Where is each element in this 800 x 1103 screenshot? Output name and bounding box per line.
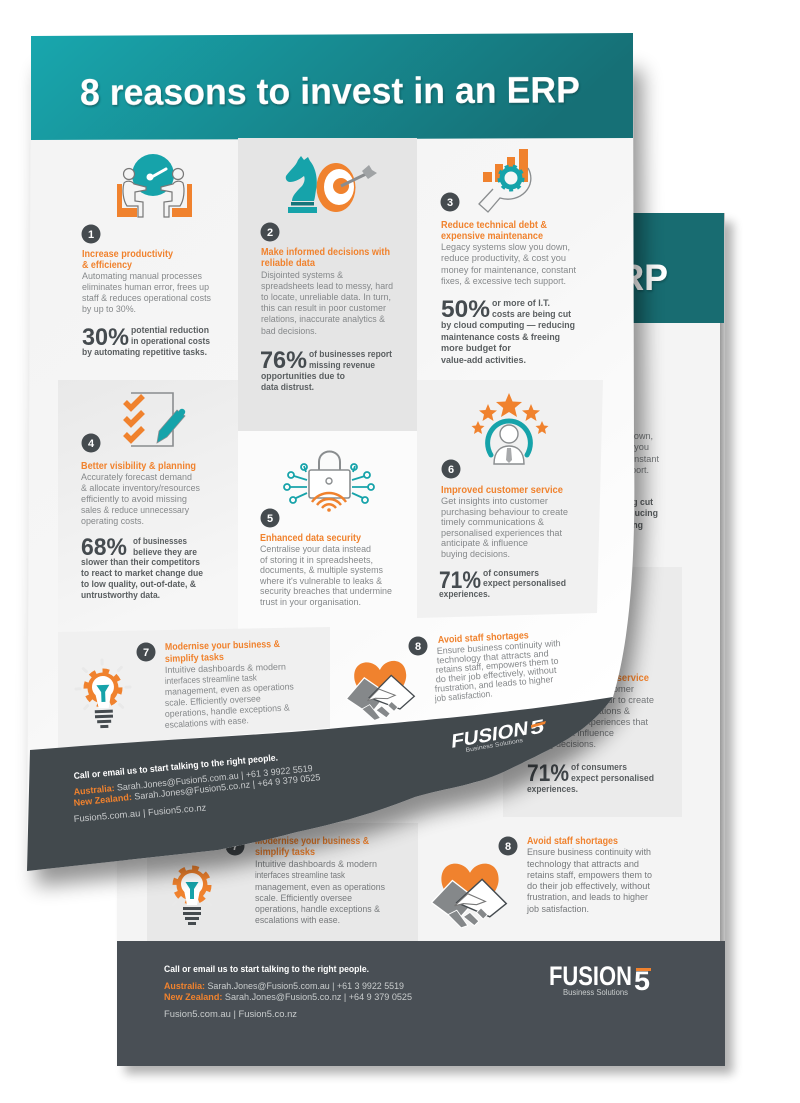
panel: reason 1 [82, 154, 211, 358]
panel: reason 8: Ensure business continuity with [436, 638, 561, 656]
panel: reason 3: maintenance costs & freeing [441, 332, 560, 343]
back footer: New Zealand: Sarah.Jones@Fusion5.co.nz | +64 9 379 0525 [164, 992, 412, 1002]
back panel: reason 3 text: by cloud computing — reducing [524, 508, 658, 519]
panel: reason 4: sales & reduce unnecessary [81, 505, 189, 516]
panel: reason 4: Better visibility & planning [81, 461, 196, 472]
back panel: reason 8: technology that attracts and [527, 859, 639, 870]
back footer: Fusion5.com.au | Fusion5.co.nz [164, 1009, 297, 1019]
back header: 8 reasons to invest in an ERP [168, 257, 668, 298]
panel: reason 3: more budget for [441, 343, 511, 354]
back panel: reason 6: of consumers [571, 762, 627, 773]
panel: reason 4: of businesses [133, 536, 187, 547]
icon: bulb in gear [75, 659, 131, 729]
back panel: reason 6: personalised experiences that [527, 717, 648, 728]
panel: reason 2: of businesses report [309, 349, 393, 360]
panel: reason 7: escalations with ease. [165, 715, 249, 730]
icon: meeting with gauge [117, 154, 192, 217]
panel: reason 2: missing revenue [309, 360, 375, 371]
back panel: reason 7: interfaces streamline task [255, 870, 345, 881]
back panel: reason 7: scale. Efficiently oversee [255, 893, 352, 904]
panel: reason 3: expensive maintenance [441, 231, 544, 242]
front footer: New Zealand: Sarah.Jones@Fusion5.co.nz | +64 9 379 0525 [73, 772, 321, 808]
back panel: reason 3 text: fixes, & excessive tech support. [524, 465, 649, 476]
panel: reason 4: to low quality, out-of-date, & [81, 579, 196, 590]
panel: reason 8: Avoid staff shortages [438, 630, 530, 646]
back logo: FUSION [549, 961, 632, 991]
panel: reason 8: do their job effectively, without [435, 665, 557, 684]
number badge 5 [260, 508, 280, 528]
front logo [451, 716, 546, 754]
back panel: reason 7: Intuitive dashboards & modern [255, 859, 377, 870]
panel: reason 5 [259, 452, 392, 608]
panel: reason 2: relations, inaccurate analytics & [261, 314, 386, 325]
front logo: FUSION [451, 718, 529, 753]
panel: reason 6: purchasing behaviour to create [441, 507, 568, 518]
panel: reason 4: Accurately forecast demand [81, 472, 192, 483]
back panel: reason 6: 71% [527, 760, 569, 787]
front footer: Australia: Sarah.Jones@Fusion5.com.au | +61 3 9922 5519 [73, 763, 313, 797]
back panel: reason 3 text: costs are being cut [574, 497, 654, 508]
panel: reason 1: staff & reduces operational costs [82, 293, 211, 304]
panel: reason 8: retains staff, empowers them to [435, 656, 559, 675]
panel: reason 3: 50% [441, 296, 490, 323]
back panel: reason 6: buying decisions. [527, 739, 596, 750]
panel: reason 1: Increase productivity [82, 249, 173, 260]
panel: reason 8 [345, 630, 561, 722]
panel: reason 2: reliable data [261, 258, 316, 269]
panel: reason 2: this can result in poor customer [261, 303, 387, 314]
panel: reason 3: Reduce technical debt & [441, 220, 547, 231]
back panel: reason 6: expect personalised [571, 773, 654, 784]
panel: reason 6: personalised experiences that [441, 528, 562, 539]
panel: reason 6: expect personalised [483, 578, 566, 589]
number badge 6 [442, 460, 460, 478]
panel: reason 7: scale. Efficiently oversee [165, 693, 261, 708]
back panel: reason 3 text: reduce productivity, & cost you [524, 442, 649, 453]
panel: reason 4: 68% [81, 534, 127, 561]
back panel: reason 8: do their job effectively, without [527, 881, 650, 892]
number badge 2: 2 [267, 227, 273, 239]
back panel: reason 6: timely communications & [527, 706, 631, 717]
panel: reason 3: or more of I.T. [492, 298, 550, 309]
panel: reason 2 [260, 156, 393, 393]
front footer: Fusion5.com.au | Fusion5.co.nz [73, 802, 207, 824]
number badge 3 [440, 192, 460, 212]
front footer: Call or email us to start talking to the right people. [73, 752, 278, 781]
icon: heart and handshake [345, 660, 415, 722]
number badge 7: 7 [143, 647, 149, 659]
back header [117, 213, 724, 323]
panel: reason 2: Make informed decisions with [261, 247, 390, 258]
number badge 4 [82, 434, 100, 452]
panel: reason 2: opportunities due to [261, 371, 345, 382]
back panel: reason 8: Ensure business continuity with [527, 847, 651, 858]
back panel: reason 8: frustration, and leads to higher [527, 892, 649, 903]
back panel: reason 6: Improved customer service [527, 673, 650, 684]
panel: reason 4: & allocate inventory/resources [81, 483, 200, 494]
number badge 5: 5 [267, 513, 273, 525]
back panel: reason 7: Modernise your business & [255, 836, 369, 847]
panel: reason 8: frustration, and leads to higher [434, 674, 554, 694]
front logo: Business Solutions [465, 738, 523, 754]
panel: reason 4: believe they are [133, 547, 197, 558]
back footer: Australia: Sarah.Jones@Fusion5.com.au | +61 3 9922 5519 [164, 981, 404, 991]
panel: reason 3: fixes, & excessive tech support. [441, 276, 566, 287]
back panel: reason 6: experiences. [527, 784, 578, 795]
panel: reason 7: Modernise your business & [165, 639, 280, 653]
panel: reason 4 [81, 393, 203, 601]
front page shadow [36, 70, 645, 886]
back panel: reason 6: Get insights into customer [527, 684, 635, 695]
panel: reason 3: by cloud computing — reducing [441, 320, 575, 331]
panel: reason 1: 30% [82, 324, 129, 351]
panel: reason 1: & efficiency [82, 260, 132, 271]
back panel: reason 7 [147, 823, 418, 941]
panel: reason 5: security breaches that undermine [260, 586, 392, 597]
back panel: reason 7: escalations with ease. [255, 915, 340, 926]
back panel: reason 7: 7 [232, 841, 238, 853]
panel: reason 6: Improved customer service [441, 485, 564, 496]
back panel: reason 8: job satisfaction. [526, 904, 589, 915]
back panel: reason 6 [503, 567, 682, 817]
panel: reason 5: of storing it in spreadsheets, [260, 555, 373, 566]
panel: reason 8: job satisfaction. [433, 688, 493, 704]
number badge 1: 1 [88, 229, 94, 241]
back panel: reason 6: anticipate & influence [527, 728, 614, 739]
icon: checklist and pen [125, 393, 185, 446]
panel: reason 6: 71% [439, 567, 481, 594]
panel: reason 3: money for maintenance, constant [441, 265, 576, 276]
panel: reason 1: eliminates human error, frees up [82, 282, 209, 293]
panel: reason 4: to react to market change due [81, 568, 203, 579]
panel: reason 2: to locate, unreliable data. In turn, [261, 292, 391, 303]
panel: reason 2: Disjointed systems & [261, 270, 344, 281]
back page shadow [125, 222, 733, 1074]
icon: chess knight and target [286, 156, 377, 213]
panel: reason 3: Legacy systems slow you down, [441, 242, 570, 253]
panel: reason 7: management, even as operations [165, 681, 294, 697]
panel: reason 5: Enhanced data security [260, 533, 362, 544]
panel: reason 6: buying decisions. [441, 549, 510, 560]
front logo: 5 [530, 716, 545, 740]
back panel: reason 3 text: Legacy systems slow you down, [524, 431, 653, 442]
back footer [117, 941, 725, 1066]
number badge 2 [260, 222, 280, 242]
front header [31, 33, 633, 140]
panel: reason 3: value-add activities. [441, 355, 526, 366]
panel backgrounds [58, 138, 603, 748]
number badge 1 [82, 224, 100, 244]
back logo: 5 [634, 966, 650, 996]
panel: reason 4: efficiently to avoid missing [81, 494, 187, 505]
panel: reason 6: Get insights into customer [441, 496, 549, 507]
number badge 6: 6 [448, 464, 454, 476]
number badge 7 [136, 642, 156, 662]
panel: reason 3: reduce productivity, & cost you [441, 253, 566, 264]
back panel: reason 3 text: money for maintenance, constant [524, 454, 659, 465]
front footer [27, 697, 613, 871]
panel: reason 2: spreadsheets lead to messy, hard [261, 281, 393, 292]
back panel: reason 8: Avoid staff shortages [527, 836, 618, 847]
panel: reason 7: Intuitive dashboards & modern [165, 662, 286, 675]
panel: reason 7 [75, 639, 294, 730]
back panel: reason 7: operations, handle exceptions & [255, 904, 381, 915]
number badge 4: 4 [88, 438, 95, 450]
panel: reason 6: of consumers [483, 568, 539, 579]
icon: bars, gear and wrench hand [479, 149, 531, 212]
panel: reason 3: costs are being cut [492, 309, 572, 320]
panel: reason 1: in operational costs [131, 336, 210, 347]
panel: reason 1: potential reduction [131, 325, 209, 336]
panel: reason 8: technology that attracts and [436, 648, 549, 665]
back footer: Call or email us to start talking to the right people. [164, 963, 369, 974]
panel: reason 4: untrustworthy data. [81, 590, 160, 601]
panel: reason 6: anticipate & influence [441, 538, 528, 549]
number badge 8 [408, 636, 428, 656]
back panel: reason 8 [432, 836, 652, 928]
front page [27, 33, 634, 871]
panel: reason 5: Centralise your data instead [260, 544, 371, 555]
panel: reason 2: 76% [260, 347, 307, 374]
panel: reason 5: documents, & multiple systems [260, 565, 383, 576]
icon: padlock with circuits and wifi [284, 452, 374, 512]
panel: reason 6: experiences. [439, 589, 490, 600]
back panel: reason 8: retains staff, empowers them to [527, 870, 652, 881]
back page [117, 213, 733, 1074]
panel: reason 5: trust in your organisation. [260, 597, 361, 608]
back panel: reason 7: management, even as operations [255, 882, 385, 893]
back panel: reason 3 text [524, 431, 659, 531]
icon: stars over customer [472, 393, 548, 464]
panel: reason 5: where it's vulnerable to leaks & [259, 576, 383, 587]
back panel: reason 7: simplify tasks [255, 847, 315, 858]
panel: reason 6 [439, 393, 568, 600]
panel: reason 1: by automating repetitive tasks. [82, 347, 207, 358]
title: 8 reasons to invest in an ERP [80, 69, 580, 113]
panel: reason 2: data distrust. [261, 382, 314, 393]
panel: reason 7: interfaces streamline task [165, 672, 257, 686]
back logo: Business Solutions [563, 988, 628, 997]
number badge 8: 8 [415, 641, 421, 653]
panel: reason 3 [440, 149, 576, 366]
panel: reason 1: Automating manual processes [82, 271, 202, 282]
panel: reason 1: by up to 30%. [82, 304, 136, 315]
back panel: reason 8: 8 [505, 841, 511, 853]
back panel: reason 6: purchasing behaviour to create [527, 695, 654, 706]
panel: reason 4: operating costs. [81, 516, 144, 527]
panel: reason 6: timely communications & [441, 517, 545, 528]
panel: reason 7: operations, handle exceptions & [165, 702, 290, 719]
number badge 3: 3 [447, 197, 453, 209]
panel: reason 2: bad decisions. [261, 326, 317, 337]
back panel: reason 3 text: maintenance costs & freeing [524, 520, 643, 531]
panel: reason 4: slower than their competitors [81, 557, 200, 568]
panel: reason 7: simplify tasks [165, 652, 225, 665]
